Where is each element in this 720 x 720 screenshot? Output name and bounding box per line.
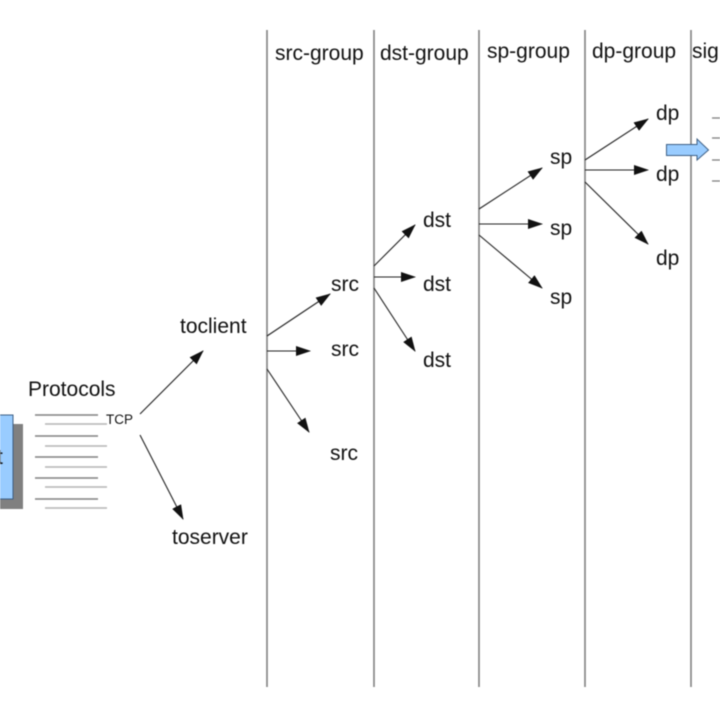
labels: dp: dp — [656, 102, 679, 125]
labels: dp: dp — [656, 163, 679, 186]
labels: dp: dp — [656, 247, 679, 270]
heading: protocols: Protocols — [28, 378, 116, 401]
labels: direction: toclient — [180, 315, 247, 338]
labels: src: src — [331, 338, 359, 361]
protocol list — [35, 415, 107, 508]
labels: dst — [423, 209, 451, 372]
labels: sp: sp — [550, 217, 572, 240]
labels: sp — [550, 146, 572, 309]
column headings: sig — [692, 40, 719, 63]
arrows — [140, 119, 648, 519]
labels: direction: toserver — [172, 526, 248, 549]
labels: sp: sp — [550, 286, 572, 309]
column headings: src-group — [275, 42, 364, 65]
labels: dst: dst — [423, 209, 451, 232]
column headings: dst-group — [380, 42, 469, 65]
signature list — [712, 118, 720, 181]
labels: src: src — [330, 442, 358, 465]
labels: src — [330, 273, 359, 465]
labels: dst: dst — [423, 273, 451, 296]
column headings — [275, 40, 719, 65]
labels: dst: dst — [423, 349, 451, 372]
column headings: sp-group — [487, 40, 570, 63]
labels: dp — [656, 102, 679, 270]
labels: direction — [172, 315, 248, 549]
label: TCP: TCP — [106, 412, 133, 427]
box: packet — [0, 415, 23, 509]
labels: sp: sp — [550, 146, 572, 169]
icon: block arrow — [666, 139, 708, 160]
column headings: dp-group — [592, 40, 676, 63]
labels: src: src — [331, 273, 359, 296]
